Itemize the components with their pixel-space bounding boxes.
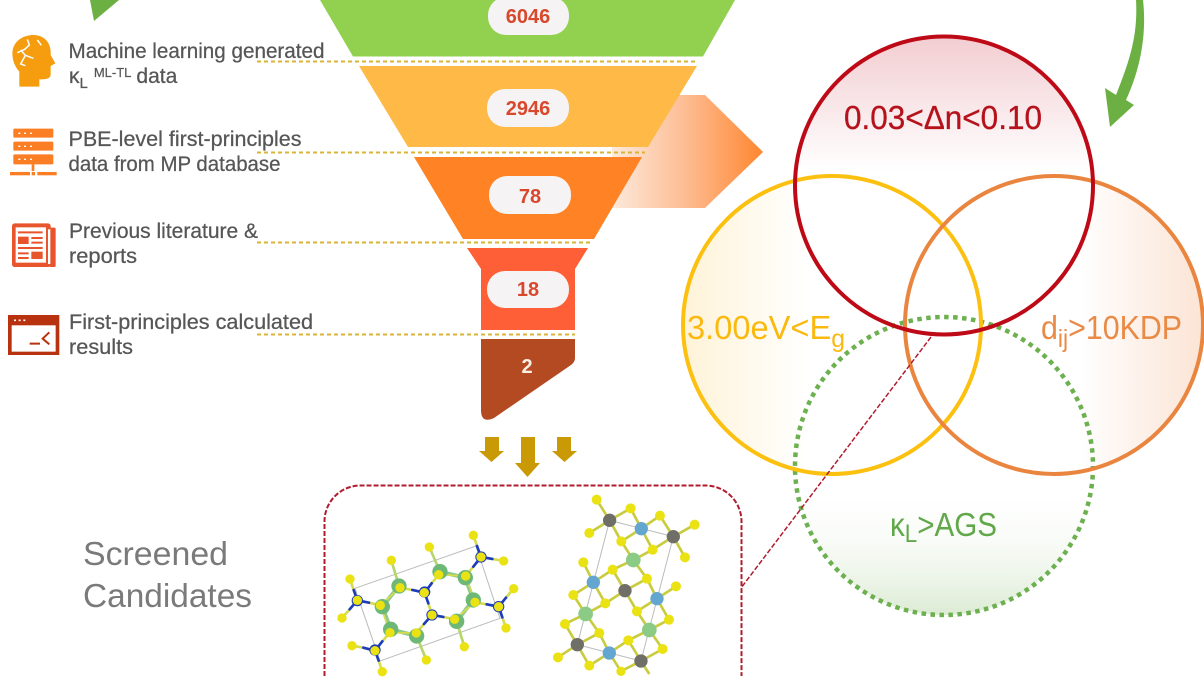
heading: screened candidates	[83, 535, 252, 614]
venn circle: green kappa	[795, 317, 1093, 615]
arrow: orange pentagon from funnel to criteria	[612, 95, 763, 208]
count pill: 2946: 2946	[506, 98, 550, 120]
count pill: 6046	[488, 0, 569, 35]
arrow: green top-left	[90, 0, 119, 21]
count pill: 78: 78	[519, 186, 541, 208]
count: 2: 2	[521, 356, 533, 378]
criterion: d_ij: >10KDP	[1068, 309, 1182, 346]
funnel tier: red	[467, 248, 588, 330]
venn circle: red delta n	[795, 36, 1093, 334]
criterion: d_ij: ij	[1058, 325, 1068, 353]
criterion: kappa: >AGS	[917, 506, 997, 543]
venn diagram	[683, 36, 1203, 615]
crystal structure: right	[553, 495, 700, 676]
heading: screened candidates: Candidates	[83, 577, 252, 614]
criterion: kappa: L	[905, 520, 917, 548]
label: first-principles: First-principles calculated	[69, 311, 313, 334]
icon: brain head	[12, 35, 55, 87]
criterion: kappa: κ	[890, 506, 906, 543]
label: previous literature	[69, 220, 258, 268]
funnel tier: yellow	[359, 66, 697, 147]
venn circle: orange d_ij	[905, 176, 1203, 474]
label: previous literature: Previous literature &	[69, 220, 258, 243]
arrow: green curved top-right	[1105, 0, 1144, 127]
count pill: 2946	[487, 89, 569, 127]
arrows: three gold down arrows	[479, 437, 577, 477]
label: machine learning: L	[80, 75, 88, 92]
icon: server	[10, 129, 57, 175]
label: PBE-level: PBE-level first-principles	[68, 128, 302, 151]
funnel tier: orange	[414, 157, 642, 239]
panel: candidates dashed box	[324, 486, 742, 676]
count pill: 6046: 6046	[506, 6, 550, 28]
heading: screened candidates: Screened	[83, 535, 228, 572]
funnel	[320, 0, 735, 420]
count pill: 18: 18	[517, 279, 539, 301]
crystal structure: left	[337, 531, 518, 676]
criterion: band gap: g	[831, 325, 845, 353]
venn fills	[683, 36, 1203, 615]
label: PBE-level: data from MP database	[68, 153, 280, 176]
label: machine learning: data	[136, 65, 178, 88]
label: previous literature: reports	[69, 245, 137, 268]
criterion: delta n: 0.03<Δn<0.10	[844, 99, 1042, 136]
icon: newspaper	[12, 223, 56, 267]
icon: terminal window	[8, 315, 59, 355]
count pill: 78	[489, 176, 571, 214]
label: first-principles: results	[69, 336, 133, 359]
label: machine learning	[68, 40, 324, 92]
label: machine learning: Machine learning generated	[68, 40, 324, 63]
criterion: d_ij: d	[1041, 309, 1059, 346]
funnel tier: green	[320, 0, 735, 56]
label: machine learning: κ	[69, 65, 80, 88]
connector: dashed line from venn centre to candidates	[741, 337, 931, 588]
count pill: 18	[487, 271, 569, 308]
funnel tier: brown	[481, 339, 575, 420]
criterion: band gap: 3.00eV<E	[687, 309, 833, 346]
label: machine learning: ML-TL	[94, 65, 131, 80]
venn circle: yellow band gap	[683, 176, 981, 474]
label: PBE-level	[68, 128, 302, 176]
label: first-principles	[69, 311, 313, 359]
